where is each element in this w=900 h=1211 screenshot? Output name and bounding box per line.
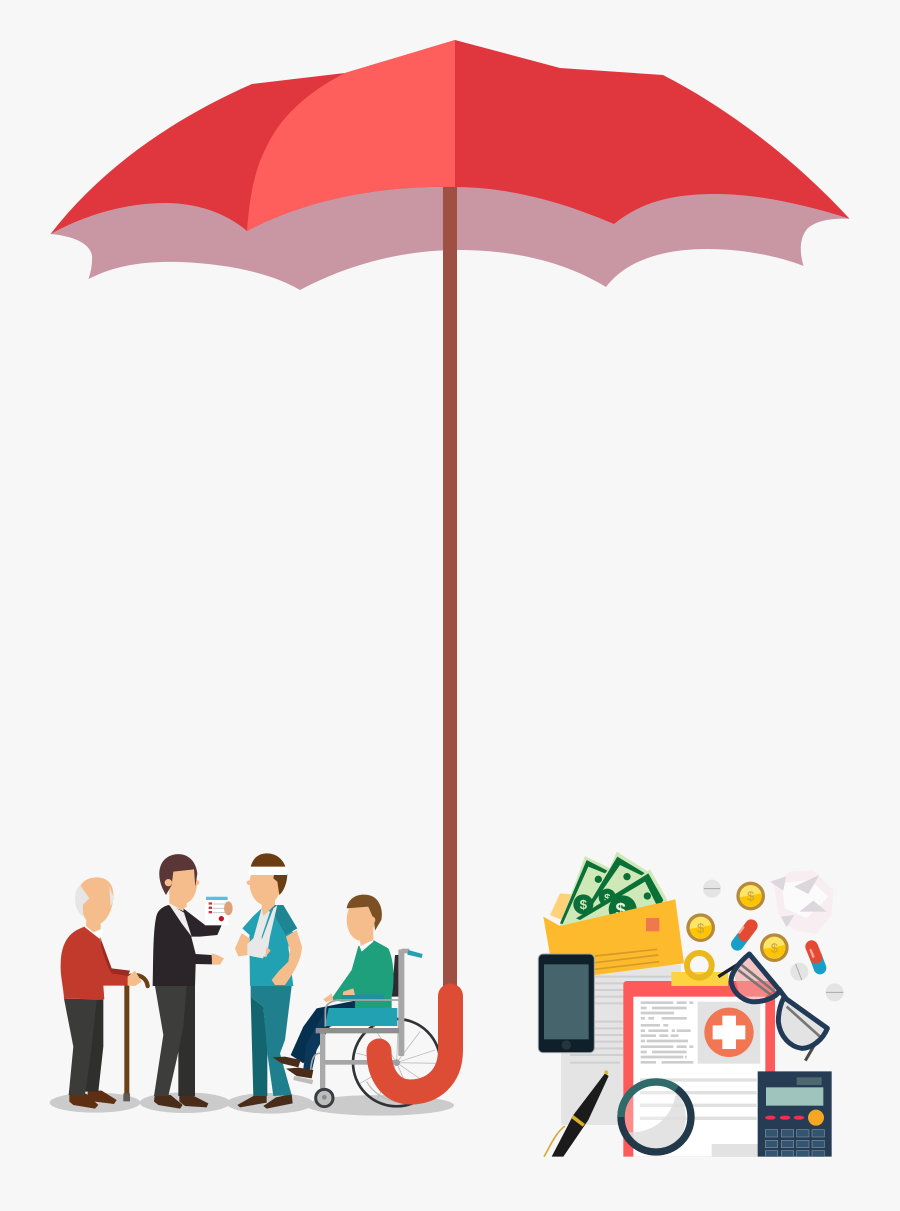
banknotes	[559, 852, 667, 933]
wheelchair user	[273, 895, 440, 1107]
pills and coins: $	[697, 921, 704, 935]
pills and coins: $	[771, 941, 778, 955]
background paper	[561, 965, 681, 1125]
money envelope	[543, 852, 684, 975]
umbrella canopy	[50, 40, 850, 290]
document	[205, 896, 233, 925]
canopy light panel	[247, 40, 455, 231]
clipboard clip	[671, 953, 728, 986]
pills and coins: $	[747, 890, 754, 904]
injured man with sling	[235, 853, 302, 1109]
banknotes: $	[615, 899, 626, 920]
expense and medical items	[538, 852, 844, 1157]
wheelchair rear wheel	[353, 1019, 440, 1106]
group of people	[50, 853, 454, 1116]
umbrella pole	[443, 187, 457, 987]
canopy underside	[50, 100, 850, 290]
magnifying glass	[621, 1082, 691, 1152]
ground shadows	[50, 1092, 454, 1116]
medical clipboard	[623, 981, 775, 1157]
fountain pen	[544, 1070, 609, 1157]
canopy outer dark panels	[50, 40, 850, 234]
crumpled paper	[770, 870, 833, 934]
calculator	[758, 1071, 832, 1157]
man in suit holding document	[153, 854, 233, 1109]
umbrella handle	[379, 996, 450, 1092]
pills and coins	[686, 880, 844, 1001]
eyeglasses	[718, 954, 827, 1061]
smartphone	[538, 954, 594, 1053]
banknotes: $	[580, 897, 588, 912]
elderly man with cane	[61, 877, 148, 1109]
banknotes: $	[604, 892, 611, 904]
